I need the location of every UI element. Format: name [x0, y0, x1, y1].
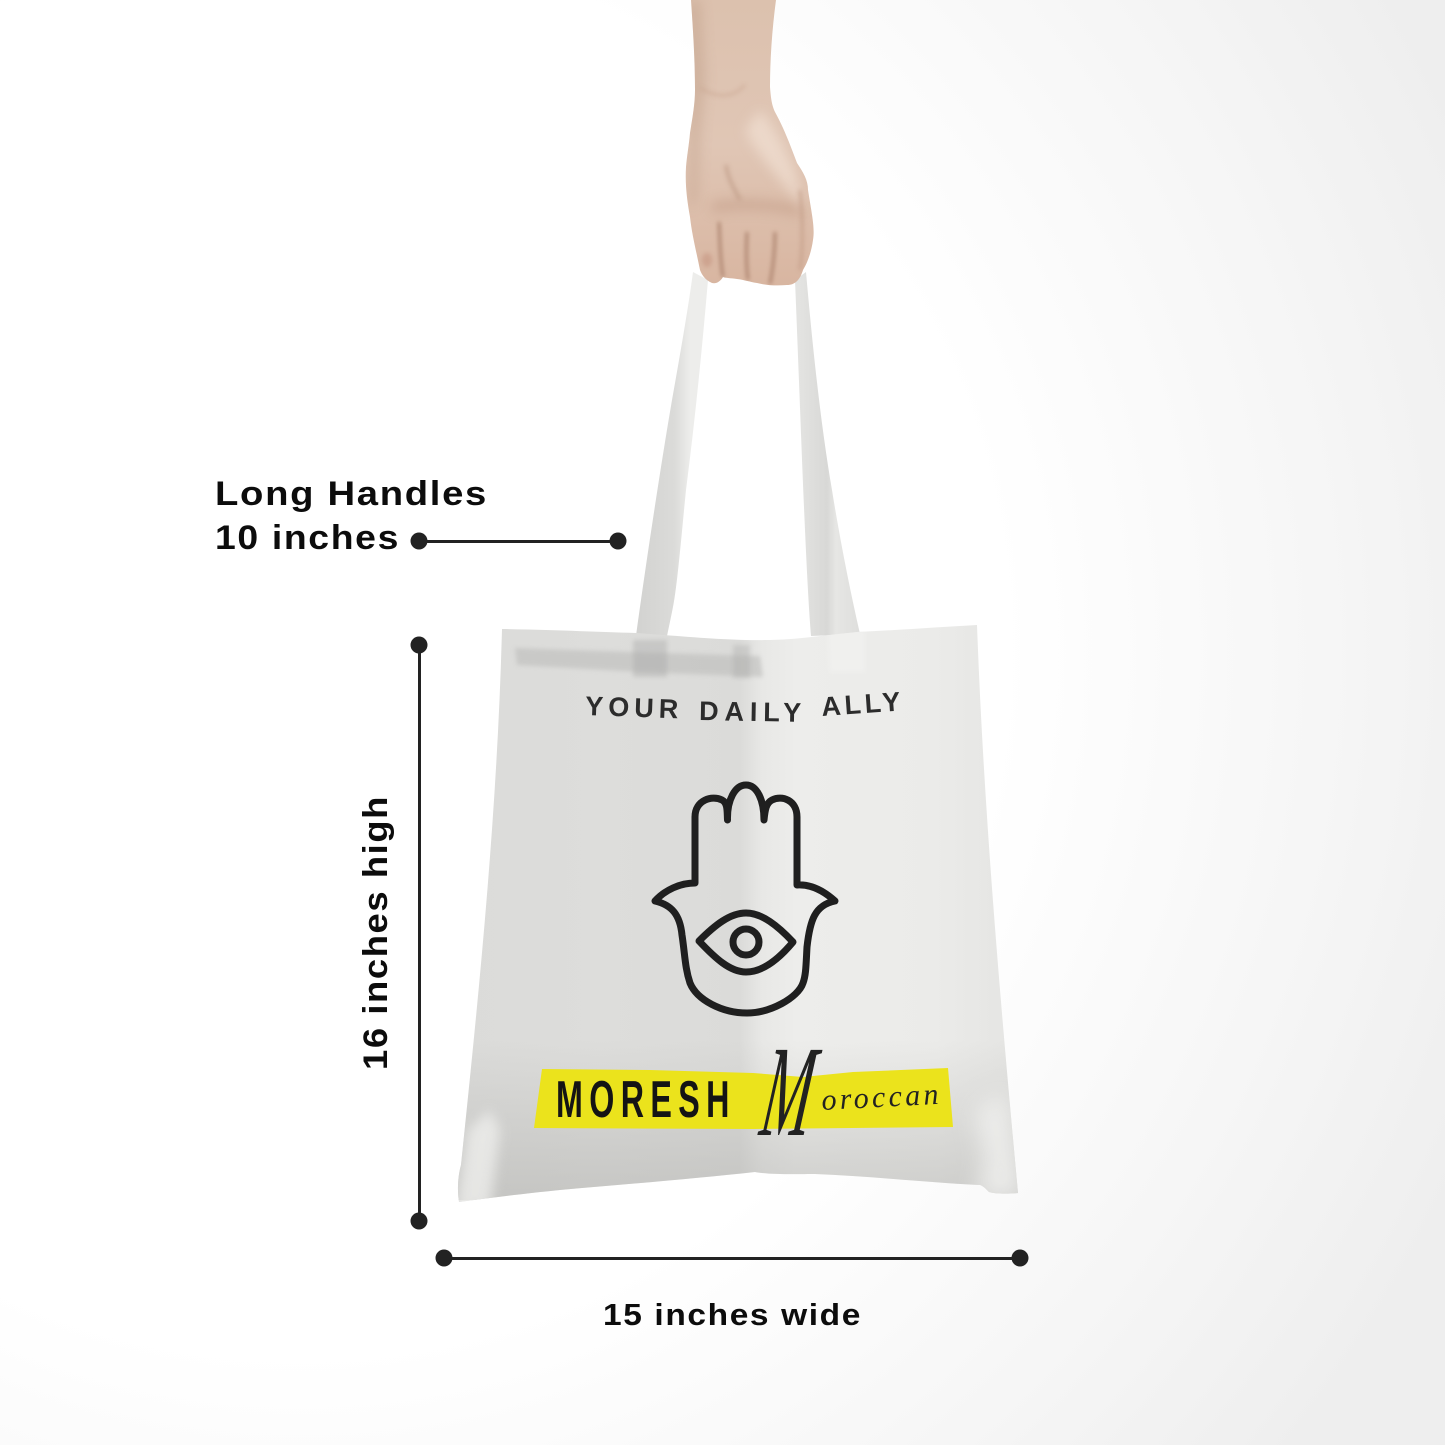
- photo: tote handles: [636, 272, 860, 636]
- brand script: M: [753, 1020, 827, 1164]
- arrow: bag height: [410, 636, 428, 1230]
- bag slogan: ALLY: [820, 687, 901, 722]
- label: width: 15 inches wide: [603, 1297, 862, 1332]
- brand name: MORESH: [556, 1071, 736, 1129]
- bag slogan: [585, 687, 901, 728]
- bag slogan: DAILY: [699, 696, 801, 728]
- arrow: bag width: [436, 1250, 1028, 1266]
- label: long handles: 10 inches: [215, 519, 400, 557]
- label: long handles: [215, 475, 488, 557]
- icon: hamsa with eye: [655, 785, 835, 1013]
- brand script tail: oroccan: [821, 1078, 942, 1117]
- photo: tote bag body: [450, 620, 1030, 1210]
- bag slogan: YOUR: [585, 691, 679, 724]
- brand banner: [534, 1020, 953, 1164]
- photo: hand holding handles: [680, 0, 820, 290]
- label: long handles: Long Handles: [215, 475, 488, 513]
- label: height: 16 inches high: [357, 795, 395, 1070]
- arrow: handle length: [410, 532, 626, 550]
